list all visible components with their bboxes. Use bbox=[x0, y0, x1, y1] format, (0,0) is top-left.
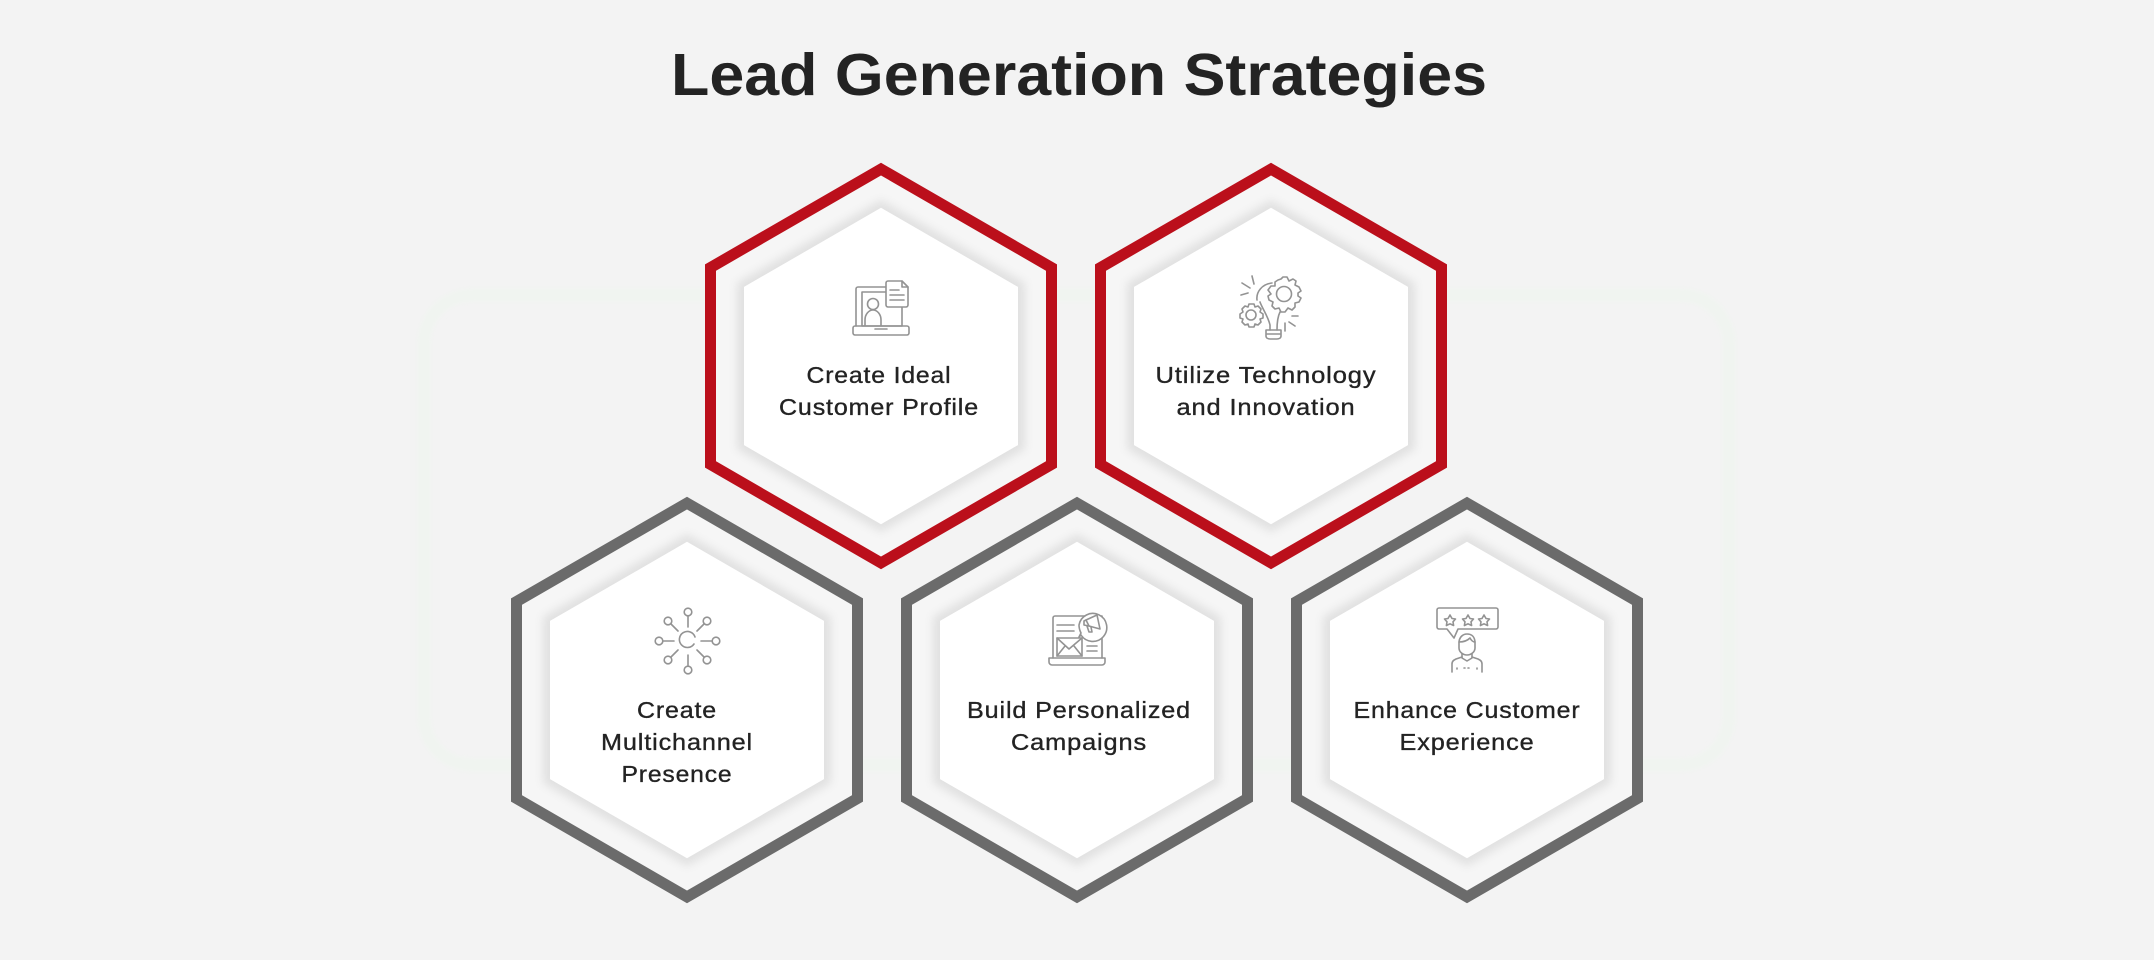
label bbox=[601, 697, 753, 787]
hexagon frame: red bbox=[1100, 169, 1442, 563]
label: Utilize Technology bbox=[1156, 362, 1376, 388]
label bbox=[1156, 362, 1376, 420]
label: Build Personalized bbox=[967, 697, 1191, 723]
label: Enhance Customer bbox=[1354, 697, 1580, 723]
panel: Enhance Customer Experience bbox=[1296, 503, 1638, 897]
icon: email campaign with megaphone bbox=[1049, 613, 1107, 665]
panel: Build Personalized Campaigns bbox=[906, 503, 1248, 897]
hexagon frame: red bbox=[710, 169, 1052, 563]
label: Create bbox=[637, 697, 717, 723]
icon: light bulb with gears bbox=[1240, 276, 1301, 339]
label bbox=[1354, 697, 1580, 755]
hexagon frame: gray bbox=[516, 503, 858, 897]
label: Presence bbox=[622, 761, 732, 787]
label: Multichannel bbox=[601, 729, 753, 755]
hexagon frame: gray bbox=[1296, 503, 1638, 897]
label: Create Ideal bbox=[806, 362, 952, 388]
label: Campaigns bbox=[1011, 729, 1147, 755]
label bbox=[779, 362, 979, 420]
title: Lead Generation Strategies bbox=[671, 42, 1487, 108]
label bbox=[967, 697, 1191, 755]
panel: Create Ideal Customer Profile bbox=[710, 169, 1052, 563]
label: Experience bbox=[1400, 729, 1534, 755]
hexagon frame: gray bbox=[906, 503, 1248, 897]
icon: network hub bbox=[655, 608, 720, 674]
label: and Innovation bbox=[1176, 394, 1356, 420]
icon: customer with star rating bbox=[1437, 608, 1498, 672]
icon: laptop with profile and document bbox=[853, 281, 909, 335]
label: Customer Profile bbox=[779, 394, 979, 420]
panel: Utilize Technology and Innovation bbox=[1100, 169, 1442, 563]
panel: Create Multichannel Presence bbox=[516, 503, 858, 897]
